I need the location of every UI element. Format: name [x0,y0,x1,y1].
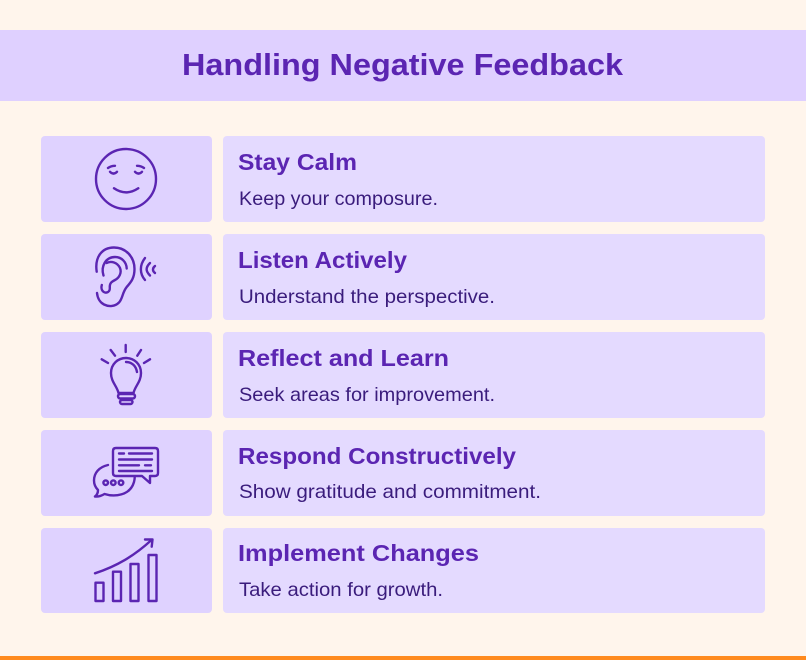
icon: growth chart [95,540,156,601]
heading: Stay Calm [238,149,357,175]
icon panel: growth chart [41,528,212,613]
text panel: reflect and learn [223,332,765,418]
text panel: listen actively [223,234,765,320]
row: listen actively [41,234,765,320]
icon panel: calm face [41,136,212,222]
icon: calm face [96,149,156,209]
heading: Respond Constructively [238,443,516,469]
text panel: stay calm [223,136,765,222]
icon panel: chat bubbles [41,430,212,516]
row: implement changes [41,528,765,613]
icon panel: light bulb [41,332,212,418]
heading: Reflect and Learn [238,345,449,371]
title: Handling Negative Feedback [182,47,624,82]
text panel: respond constructively [223,430,765,516]
description: Show gratitude and commitment. [239,481,541,503]
description: Seek areas for improvement. [239,384,495,406]
icon: chat bubbles [94,448,158,497]
description: Take action for growth. [239,579,443,601]
icon: ear [96,248,155,306]
text panel: implement changes [223,528,765,613]
icon: light bulb [102,345,150,404]
description: Keep your composure. [239,188,438,210]
row: respond constructively [41,430,765,516]
bottom accent bar [0,656,806,660]
heading: Listen Actively [238,247,407,273]
icon panel: ear [41,234,212,320]
title banner [0,30,806,101]
description: Understand the perspective. [239,286,495,308]
heading: Implement Changes [238,540,479,566]
row: stay calm [41,136,765,222]
row: reflect and learn [41,332,765,418]
